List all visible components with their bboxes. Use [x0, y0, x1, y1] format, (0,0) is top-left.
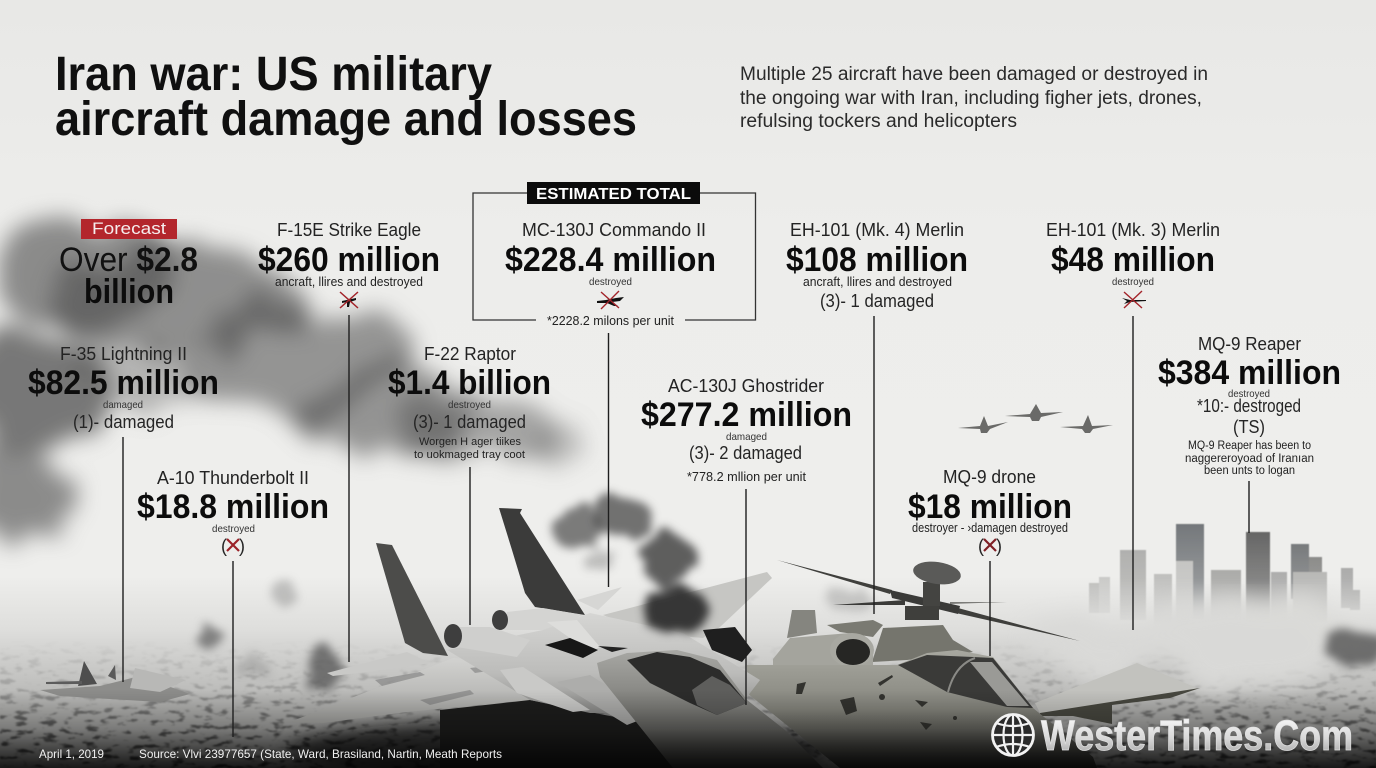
underside [440, 700, 690, 768]
wing [1035, 663, 1197, 713]
panel: AC-130J Ghostrider: *778.2 mllion per unit [687, 470, 807, 484]
distant downed jet [40, 661, 190, 702]
panel: MQ-9 Reaper: MQ-9 Reaper [1198, 333, 1301, 354]
panel: MQ-9 Reaper: naggereroyoad of Iranıan [1185, 453, 1314, 465]
panel: estimated total, MC-130J Commando II: $228.4 million [505, 241, 716, 279]
intro text [740, 64, 1208, 132]
panel: EH-101 (Mk. 4) Merlin: (3)- 1 damaged [820, 291, 934, 311]
panel: EH-101 (Mk. 4) Merlin [786, 219, 968, 614]
panel: MQ-9 drone: ( ) [978, 536, 1002, 556]
panel: MQ-9 drone: MQ-9 drone [943, 466, 1036, 487]
panel: EH-101 (Mk. 3) Merlin: EH-101 (Mk. 3) Merlin [1046, 219, 1220, 240]
ground texture [0, 640, 1376, 768]
panel: MQ-9 Reaper: (TS) [1233, 417, 1265, 437]
icon: destroyed aircraft [1122, 291, 1146, 308]
helicopter [747, 559, 1200, 768]
panel: A-10 Thunderbolt II: ( ) [221, 536, 245, 556]
panel: F-15E Strike Eagle: F-15E Strike Eagle [277, 219, 421, 240]
panel: MQ-9 Reaper [1158, 333, 1341, 533]
title [55, 48, 637, 146]
icon: destroyed aircraft [340, 292, 358, 308]
footer source: Source: Vlvi 23977657 (State, Ward, Brasiland, Nartin, Meath Reports [139, 747, 502, 761]
canopy [898, 655, 1033, 708]
panel: AC-130J Ghostrider: (3)- 2 damaged [689, 443, 802, 463]
panel: F-22 Raptor: $1.4 billion [388, 364, 551, 402]
panel: forecast: Forecast [92, 220, 166, 238]
distant smoke puffs [201, 584, 876, 692]
intro text: Multiple 25 aircraft have been damaged or destroyed in [740, 64, 1208, 85]
panel: F-22 Raptor: F-22 Raptor [424, 343, 516, 364]
panel: estimated total, MC-130J Commando II: destroyed [589, 276, 632, 288]
panel: F-22 Raptor: destroyed [448, 399, 491, 411]
cockpit [627, 652, 747, 715]
panel: F-35 Lightning II: damaged [103, 399, 143, 411]
nose [597, 650, 823, 768]
panel: EH-101 (Mk. 3) Merlin: destroyed [1112, 276, 1154, 288]
title: aircraft damage and losses [55, 93, 637, 146]
panel: A-10 Thunderbolt II: $18.8 million [137, 488, 329, 526]
icon: red cross [984, 539, 996, 551]
panel: EH-101 (Mk. 4) Merlin: ancraft, llires and destroyed [803, 275, 952, 289]
panel: estimated total, MC-130J Commando II: MC-130J Commando II [522, 219, 706, 240]
icon: red cross [227, 539, 239, 551]
panel: EH-101 (Mk. 4) Merlin: EH-101 (Mk. 4) Merlin [790, 219, 964, 240]
panel: AC-130J Ghostrider: $277.2 million [641, 396, 852, 434]
panel: AC-130J Ghostrider: AC-130J Ghostrider [668, 375, 824, 396]
panel: F-35 Lightning II: $82.5 million [28, 364, 219, 402]
panel: MQ-9 Reaper: been unts to logan [1204, 465, 1295, 477]
panel: AC-130J Ghostrider: damaged [726, 431, 767, 443]
panel: F-22 Raptor: (3)- 1 damaged [413, 412, 526, 432]
panel: AC-130J Ghostrider [641, 375, 852, 705]
panel: F-22 Raptor: Worgen H ager tiikes [419, 436, 521, 448]
panel: MQ-9 Reaper: destroyed [1228, 388, 1270, 400]
fighter jet [290, 508, 823, 768]
icon: globe [992, 714, 1034, 756]
intro text: refulsing tockers and helicopters [740, 111, 1017, 132]
panel: MQ-9 Reaper: *10:- destroged [1197, 396, 1301, 416]
fuselage panel marks [796, 675, 957, 730]
intro text: the ongoing war with Iran, including figher jets, drones, [740, 88, 1202, 109]
panel: EH-101 (Mk. 4) Merlin: $108 million [786, 241, 968, 279]
city skyline [1088, 523, 1360, 618]
panel: MQ-9 drone: $18 million [908, 488, 1072, 526]
panel: A-10 Thunderbolt II [137, 467, 329, 737]
icon: destroyed aircraft [597, 291, 624, 309]
fuselage [747, 650, 1097, 768]
panel: F-15E Strike Eagle: ancraft, llires and destroyed [275, 275, 423, 289]
dark terrain under aircraft [290, 718, 830, 768]
fog in front of city [1040, 607, 1376, 683]
panel: estimated total, MC-130J Commando II [473, 182, 756, 587]
footer date: April 1, 2019 [39, 747, 104, 761]
ground darkening [0, 690, 1376, 768]
panel: MQ-9 drone: destroyer - ›damagen destroyed [912, 521, 1068, 535]
main smoke column [554, 495, 707, 636]
panel: MQ-9 drone [908, 466, 1072, 656]
panel: F-15E Strike Eagle: $260 million [258, 241, 440, 279]
panel: forecast: billion [84, 273, 174, 311]
panel: estimated total, MC-130J Commando II: *2228.2 milons per unit [547, 314, 675, 328]
panel: A-10 Thunderbolt II: A-10 Thunderbolt II [157, 467, 309, 488]
distant formation of three aircraft [958, 404, 1113, 433]
panel: A-10 Thunderbolt II: destroyed [212, 523, 255, 535]
panel: F-22 Raptor: to uokmaged tray coot [414, 449, 525, 461]
rotor blades [777, 560, 892, 594]
panel: F-35 Lightning II: (1)- damaged [73, 412, 174, 432]
panel: MQ-9 Reaper: MQ-9 Reaper has been to [1188, 440, 1311, 452]
dark smoke right edge [1320, 628, 1376, 668]
smoke cloud: upper left [0, 220, 590, 540]
wing stains [375, 664, 508, 705]
panel: F-22 Raptor [388, 343, 551, 625]
panel: estimated total, MC-130J Commando II: ESTIMATED TOTAL [536, 186, 691, 203]
panel: F-35 Lightning II: F-35 Lightning II [60, 343, 187, 364]
panel: EH-101 (Mk. 3) Merlin [1046, 219, 1220, 630]
title: Iran war: US military [55, 48, 492, 101]
panel: EH-101 (Mk. 3) Merlin: $48 million [1051, 241, 1215, 279]
panel: MQ-9 Reaper: $384 million [1158, 354, 1341, 392]
panel: F-35 Lightning II [28, 343, 219, 682]
panel: forecast: Over $2.8 [59, 241, 198, 279]
panel: F-15E Strike Eagle [258, 219, 440, 662]
panel: forecast [59, 219, 198, 311]
